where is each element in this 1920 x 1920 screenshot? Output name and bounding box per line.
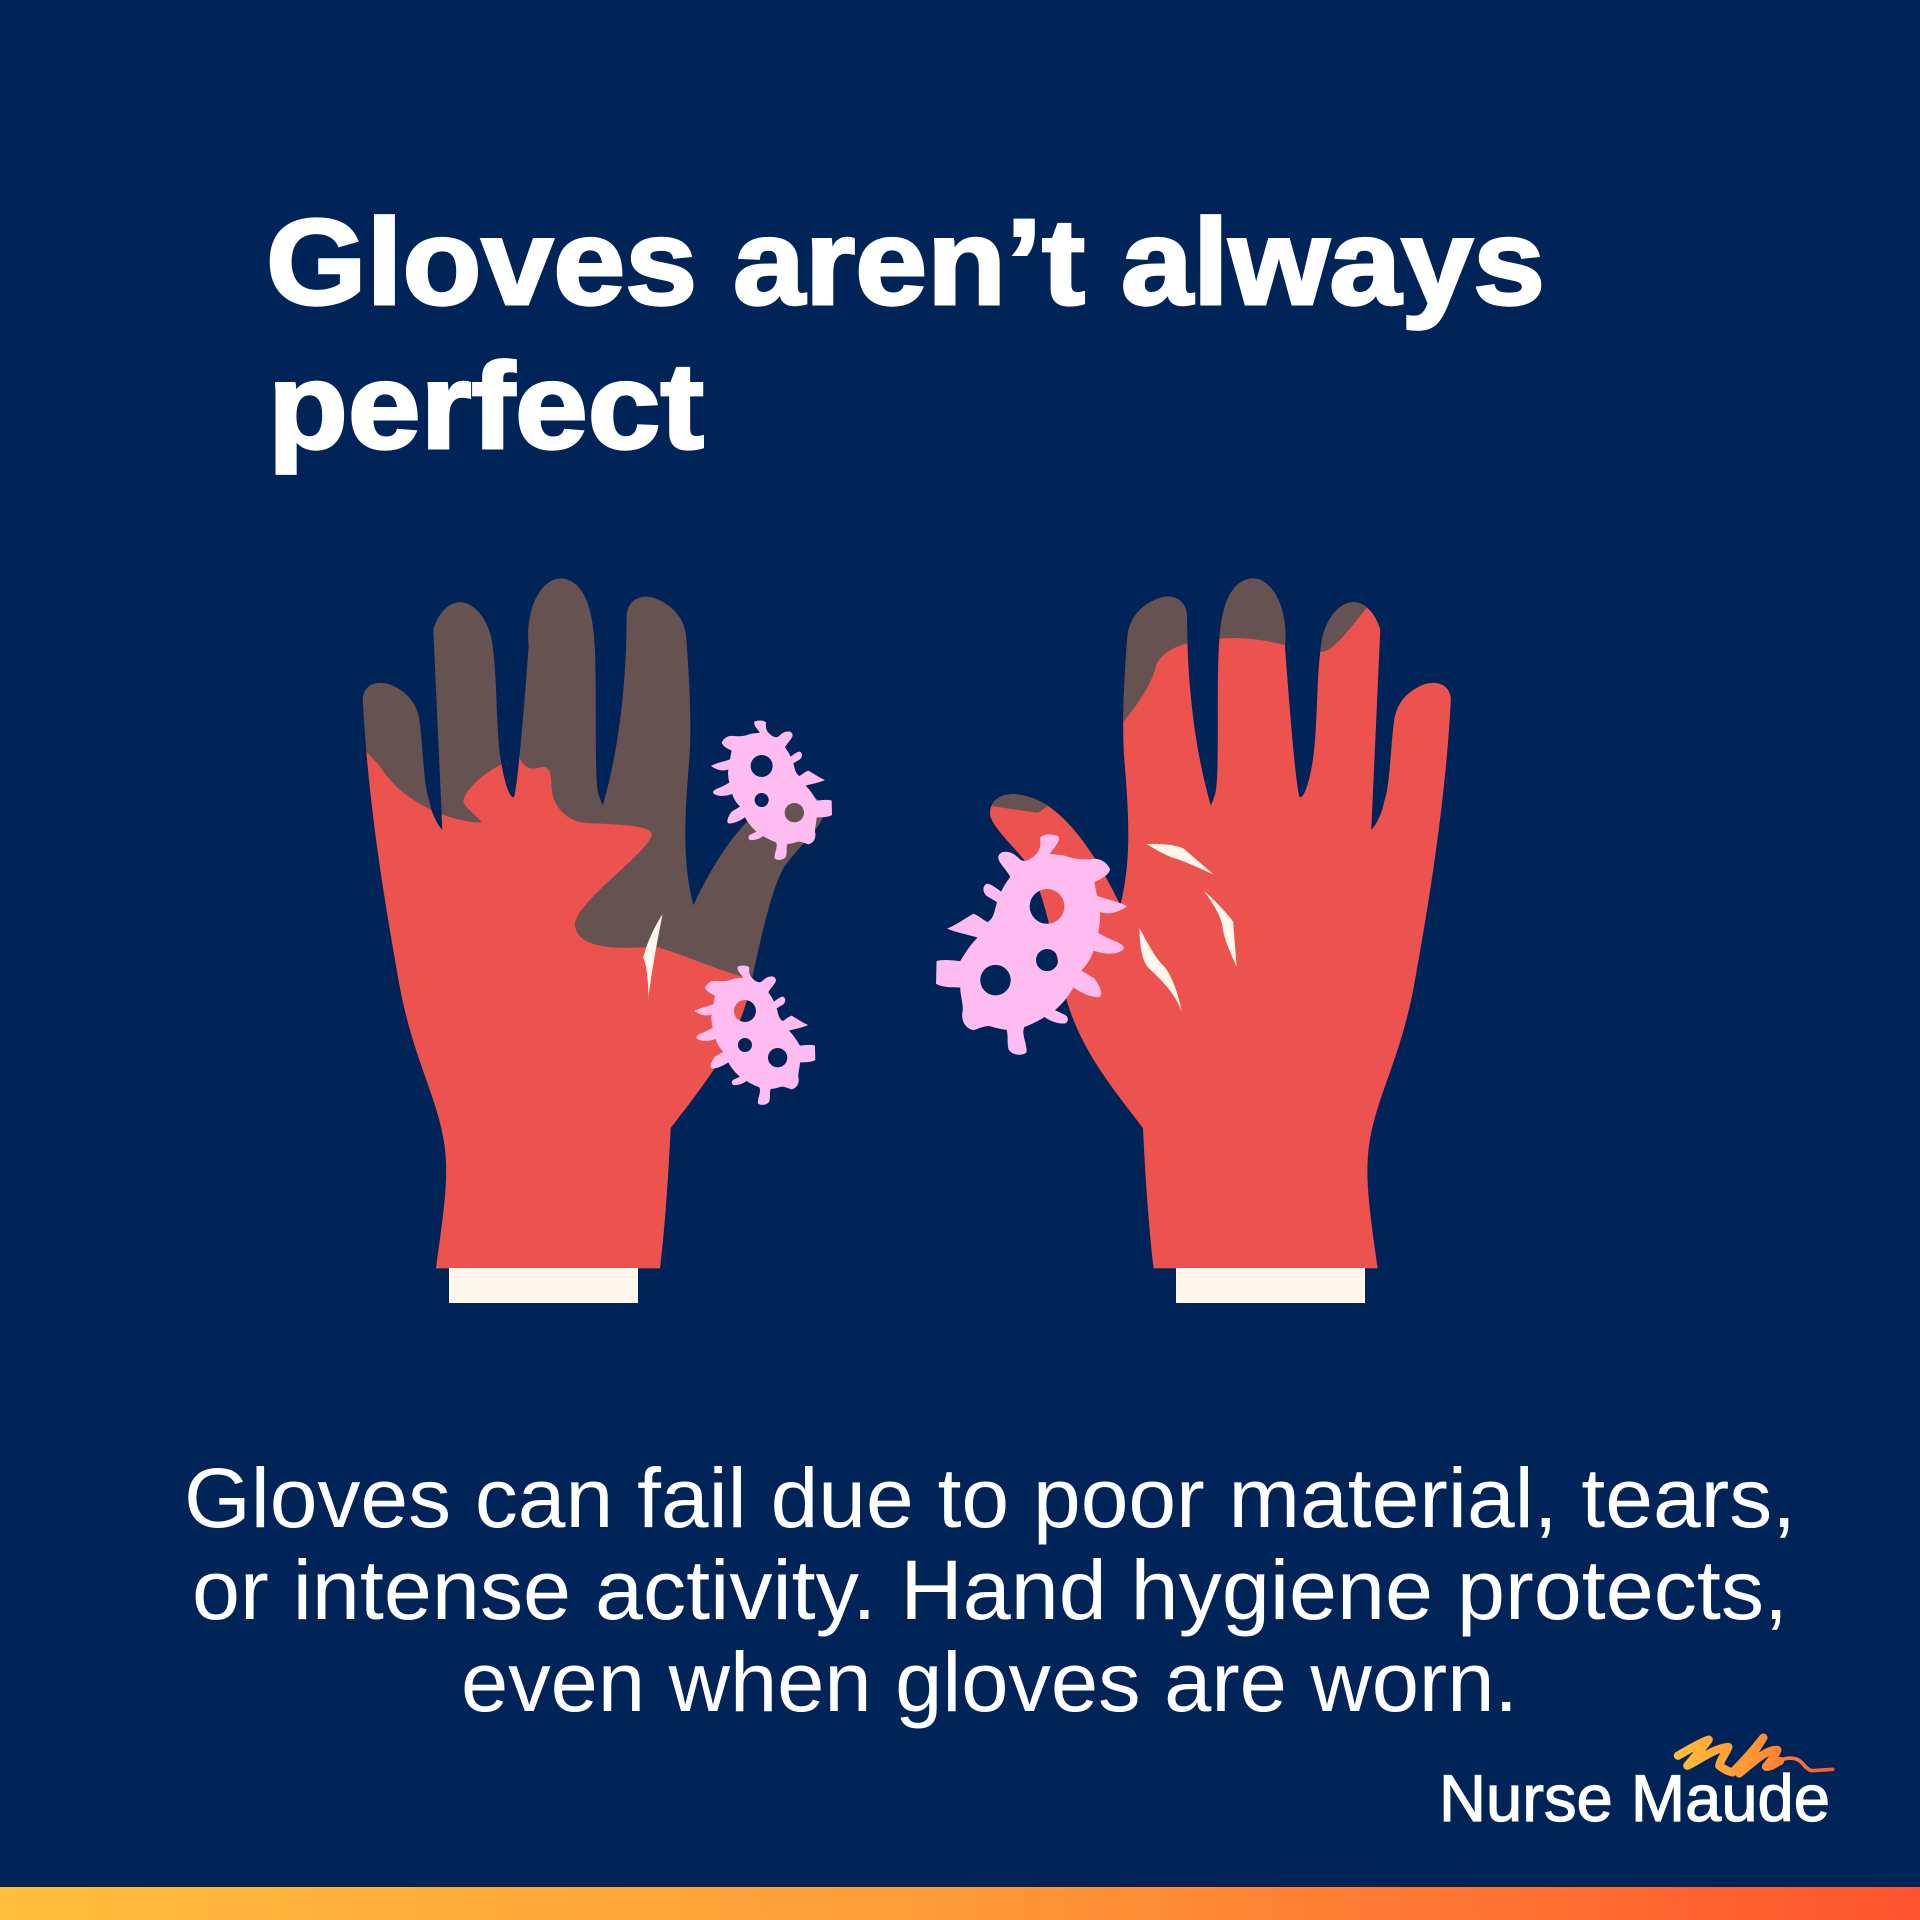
title: Gloves aren’t always bbox=[266, 194, 1545, 330]
right glove bbox=[990, 578, 1451, 1268]
body text: or intense activity. Hand hygiene protects, bbox=[192, 1543, 1788, 1637]
title bbox=[266, 194, 1545, 474]
germ: large on right glove bbox=[936, 834, 1127, 1055]
right glove tears bbox=[1140, 844, 1237, 1012]
left glove bbox=[362, 578, 823, 1268]
bottom gradient bar bbox=[0, 1887, 1920, 1920]
left glove body with exposed brown skin bbox=[362, 578, 823, 1268]
left glove tear bbox=[643, 914, 663, 998]
logo swoosh bbox=[1678, 1738, 1833, 1773]
logo: Nurse Maude: Nurse Maude bbox=[1439, 1761, 1830, 1835]
right glove body with brown fingertips bbox=[990, 578, 1451, 1268]
body text: even when gloves are worn. bbox=[461, 1635, 1518, 1729]
body text bbox=[184, 1451, 1796, 1729]
right glove cuff bbox=[1176, 1268, 1365, 1303]
left glove cuff bbox=[449, 1268, 638, 1303]
germ: lower left bbox=[694, 965, 815, 1105]
germ: upper left bbox=[711, 720, 832, 860]
body text: Gloves can fail due to poor material, tears, bbox=[184, 1451, 1796, 1545]
title: perfect bbox=[268, 338, 704, 474]
